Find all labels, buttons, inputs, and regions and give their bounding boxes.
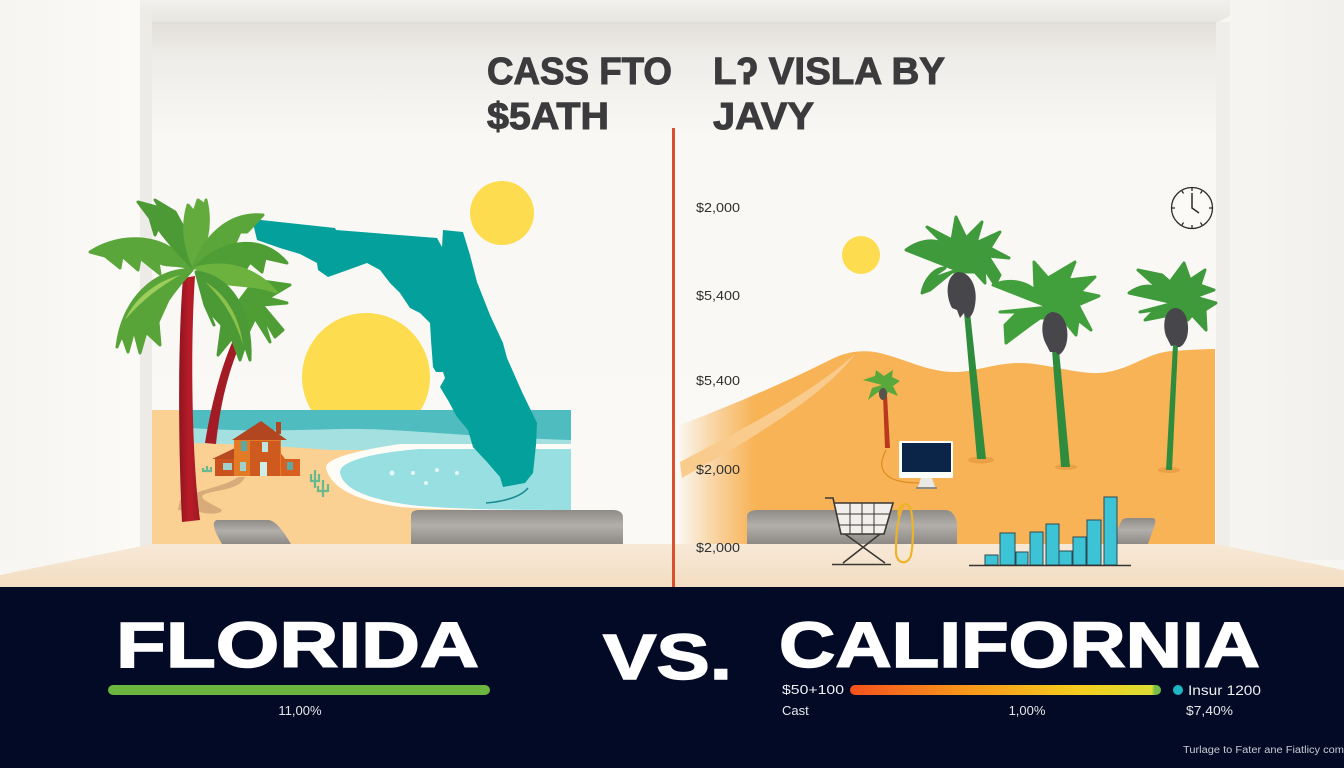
sand path bbox=[178, 477, 245, 514]
shoreline foam and lagoon bbox=[326, 444, 571, 510]
Florida progress bar bbox=[108, 685, 490, 695]
small sun bbox=[470, 181, 534, 245]
price axis labels: $2,000 bbox=[696, 540, 740, 555]
sofa, far right bbox=[1110, 518, 1155, 544]
price axis labels bbox=[696, 200, 740, 555]
lagoon ripples bbox=[390, 468, 459, 485]
small palm tree bbox=[863, 370, 900, 448]
sofa, left bbox=[214, 520, 291, 544]
price axis labels: $5,400 bbox=[696, 373, 740, 388]
large setting sun bbox=[302, 313, 430, 410]
price axis labels: $5,400 bbox=[696, 288, 740, 303]
tall palm tree C bbox=[1129, 263, 1216, 473]
sofa, centre bbox=[411, 510, 623, 544]
tall palm tree B bbox=[993, 262, 1099, 470]
sofa, right centre bbox=[747, 510, 957, 544]
heading: Florida: FLORIDA bbox=[116, 609, 479, 681]
legend value: $7,40% bbox=[1186, 703, 1233, 718]
panel: California desert scene bbox=[680, 188, 1216, 566]
Florida Keys bbox=[486, 488, 528, 503]
bottom band bbox=[0, 587, 1344, 768]
legend label: Insur 1200 bbox=[1188, 682, 1261, 698]
price axis labels: $2,000 bbox=[696, 462, 740, 477]
room background bbox=[0, 0, 1344, 590]
price axis labels: $2,000 bbox=[696, 200, 740, 215]
beach house bbox=[212, 421, 300, 476]
legend dot bbox=[1173, 685, 1183, 695]
Florida bar value: 11,00% bbox=[278, 703, 322, 718]
California gradient bar bbox=[850, 685, 1161, 695]
cacti bbox=[203, 466, 328, 497]
near palm tree bbox=[90, 200, 287, 522]
title: right column: JAVY bbox=[713, 96, 814, 138]
centre divider line bbox=[672, 128, 675, 587]
tall palm tree A bbox=[906, 217, 1009, 464]
sand bbox=[152, 410, 571, 544]
California bar left label: $50+100 bbox=[782, 682, 844, 697]
title: right column: Lʔ VISLA BY bbox=[713, 51, 945, 93]
shopping cart icon bbox=[825, 498, 893, 564]
title: right column bbox=[713, 51, 945, 138]
title: left column: $5ATH bbox=[487, 96, 609, 138]
computer monitor bbox=[899, 441, 953, 489]
footer note: Turlage to Fater ane Fiatlicy com bbox=[1183, 745, 1344, 756]
California bar value: 1,00% bbox=[1009, 703, 1046, 718]
desert dune bbox=[680, 349, 1215, 544]
California cost label: Cast bbox=[782, 703, 809, 718]
Florida state map bbox=[252, 219, 537, 487]
clock icon bbox=[1172, 188, 1212, 228]
title: left column: CASS FTO bbox=[487, 51, 672, 93]
dune highlight bbox=[680, 354, 855, 478]
title: left column bbox=[487, 51, 672, 138]
far palm tree bbox=[205, 280, 290, 444]
heading: VS.: VS. bbox=[603, 621, 732, 693]
heading: California: CALIFORNIA bbox=[779, 609, 1260, 681]
panel: Florida beach scene bbox=[90, 181, 623, 544]
shallow water bbox=[190, 428, 571, 450]
paper clip icon bbox=[896, 504, 913, 562]
ocean bbox=[190, 410, 571, 443]
cable bbox=[882, 450, 920, 483]
sun bbox=[842, 236, 880, 274]
bar chart bbox=[969, 497, 1131, 566]
